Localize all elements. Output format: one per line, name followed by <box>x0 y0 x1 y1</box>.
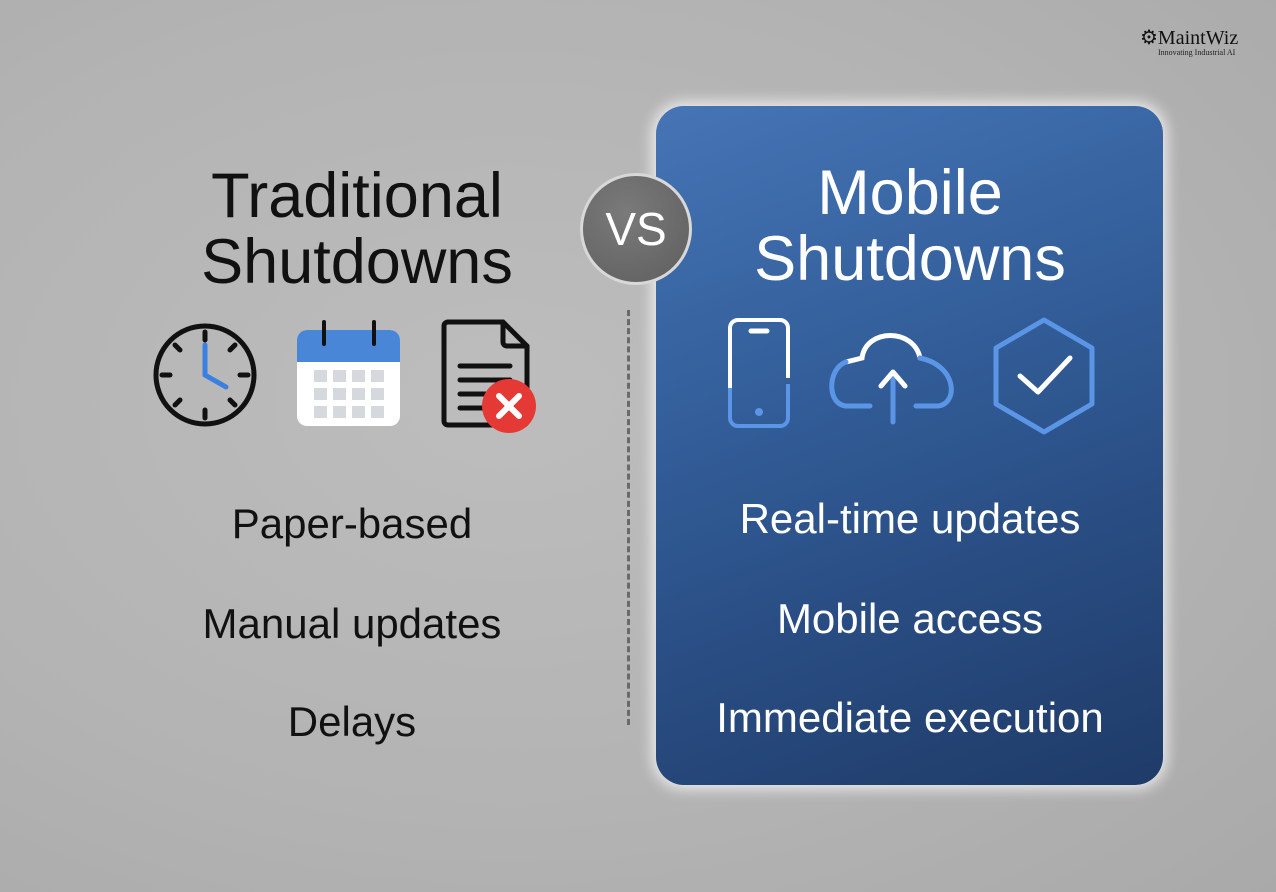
icon: clock <box>154 324 256 426</box>
list: mobile <box>716 495 1104 741</box>
title: mobile <box>754 158 1066 294</box>
title: traditional <box>201 161 513 297</box>
logo: Innovating Industrial AI <box>1158 48 1235 57</box>
list: traditional <box>203 500 501 745</box>
divider dashed <box>627 310 630 725</box>
icon: cloud upload <box>829 333 954 424</box>
item: paper-based: Paper-based <box>232 500 472 547</box>
icon: calendar <box>297 320 400 426</box>
title: traditional: Shutdowns <box>201 227 513 297</box>
title: mobile: Shutdowns <box>754 224 1066 294</box>
vs badge: VS <box>605 203 667 255</box>
item: immediate execution: Immediate execution <box>716 694 1104 741</box>
item: mobile access: Mobile access <box>777 595 1043 642</box>
title: mobile: Mobile <box>817 158 1003 228</box>
item: manual updates: Manual updates <box>203 600 501 647</box>
icon: hexagon check <box>994 318 1094 434</box>
icon: phone <box>728 318 790 428</box>
title: traditional: Traditional <box>211 161 503 231</box>
item: delays: Delays <box>288 698 416 745</box>
icon: document with x <box>442 320 536 433</box>
logo: ⚙MaintWiz <box>1140 27 1238 49</box>
item: real-time updates: Real-time updates <box>740 495 1080 542</box>
vs badge <box>580 173 692 285</box>
panel: mobile <box>656 106 1163 785</box>
